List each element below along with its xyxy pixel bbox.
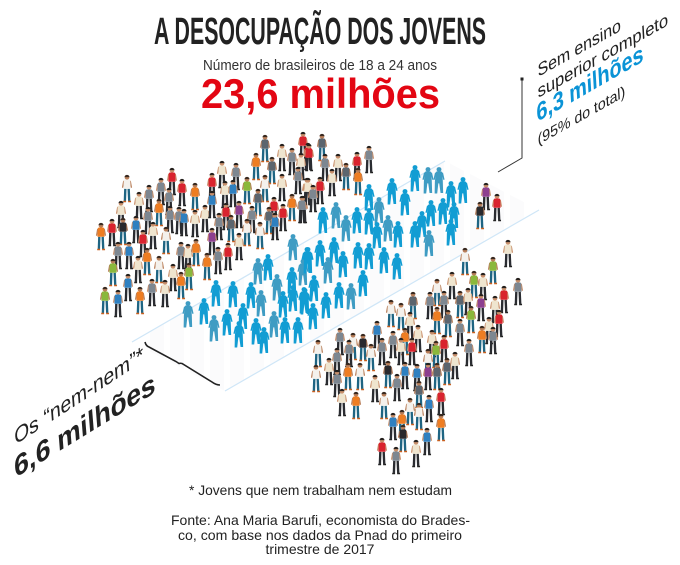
callout: sem ensino superior completo <box>536 9 669 149</box>
callout: sem ensino superior completo: superior completo <box>537 9 669 102</box>
headline number: 23,6 milhões: 23,6 milhões <box>201 70 440 117</box>
callout: nem-nem: Os “nem-nem”* <box>13 341 145 450</box>
footnote: * Jovens que nem trabalham nem estudam <box>189 482 452 498</box>
callout leader line <box>498 78 524 172</box>
brace under the nem-nem group <box>145 342 220 385</box>
source note: Fonte: Ana Maria Barufi, economista do Brades- <box>171 512 470 528</box>
callout: sem ensino superior completo: (95% do total) <box>537 83 626 149</box>
floor band of the blue group <box>132 150 539 400</box>
source note: co, com base nos dados da Pnad do primeiro <box>178 527 462 543</box>
callout: nem-nem: 6,6 milhões <box>13 366 156 485</box>
people: blue group (higher education) <box>183 165 468 354</box>
source note <box>171 512 470 557</box>
subtitle: Número de brasileiros de 18 a 24 anos <box>203 58 437 74</box>
callout: sem ensino superior completo: 6,3 milhões <box>536 39 644 128</box>
callout: sem ensino superior completo: Sem ensino <box>537 14 621 81</box>
source note: trimestre de 2017 <box>266 541 375 557</box>
people: north-west group <box>97 132 373 316</box>
people: east and south group <box>312 183 522 474</box>
